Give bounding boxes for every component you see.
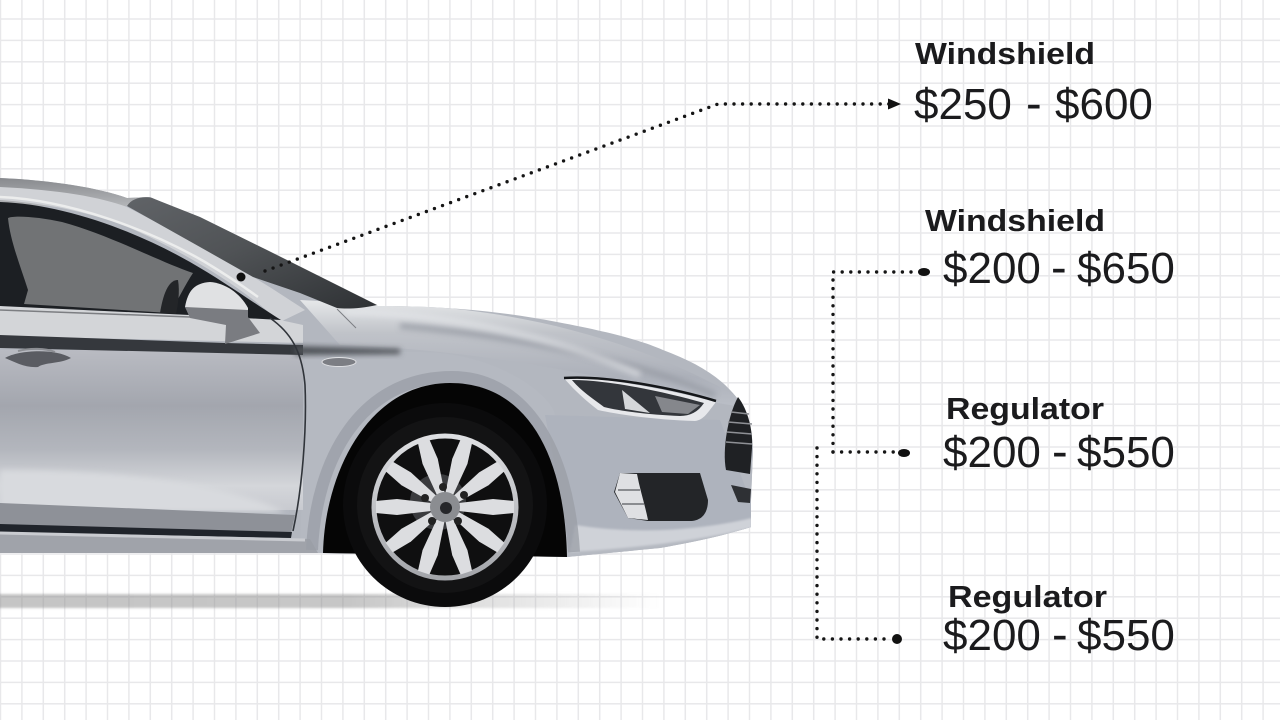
wheel arch opening xyxy=(323,383,567,557)
side marker badge xyxy=(322,358,356,366)
spokes xyxy=(376,439,514,575)
price: 200 to 550: $200 xyxy=(943,428,1041,477)
price: 200 to 550 second: - xyxy=(1052,607,1068,660)
leader: windshield to first price xyxy=(236,98,901,282)
A-pillar highlight xyxy=(0,197,258,297)
hub and lug nuts xyxy=(421,483,468,525)
label: regulator 1: Regulator xyxy=(946,391,1104,426)
price: 200 to 650: $200 xyxy=(943,244,1041,293)
roof xyxy=(0,178,156,206)
price: 200 to 650: - xyxy=(1051,240,1067,293)
price: 200 to 550: $550 xyxy=(1077,428,1175,477)
label: regulator 2: Regulator xyxy=(948,579,1107,614)
price: 200 to 550: - xyxy=(1052,424,1068,477)
side mirror xyxy=(185,282,260,344)
door handle xyxy=(5,349,71,367)
belt moulding xyxy=(0,306,303,343)
price: 250 to 600: $600 xyxy=(1055,80,1153,129)
rim xyxy=(374,436,516,578)
car body xyxy=(0,170,760,570)
leader: second price to third price xyxy=(833,268,930,457)
fog lamp housing xyxy=(614,473,708,521)
dark belt line xyxy=(0,335,303,355)
leader: fourth price xyxy=(817,448,902,644)
brake disc xyxy=(410,474,466,530)
car illustration xyxy=(0,170,760,607)
door panel xyxy=(0,381,303,510)
seat silhouette xyxy=(160,280,179,314)
front fender and bumper xyxy=(329,435,753,557)
wheel xyxy=(343,403,547,607)
side window frame xyxy=(0,202,281,320)
price: 250 to 600: - xyxy=(1026,76,1042,129)
label: windshield 2: Windshield xyxy=(925,203,1105,238)
side window glass xyxy=(8,217,193,313)
label: windshield 1: Windshield xyxy=(915,36,1095,71)
roof rail highlight xyxy=(0,187,305,322)
windshield xyxy=(127,197,377,309)
wheel arch lip xyxy=(312,377,574,552)
grille xyxy=(725,397,752,503)
lower door band xyxy=(0,503,295,533)
price: 200 to 650: $650 xyxy=(1077,244,1175,293)
hood xyxy=(300,300,738,398)
tyre xyxy=(343,403,547,607)
door shut line xyxy=(270,318,305,531)
ground shadow xyxy=(0,594,660,608)
price: 250 to 600: $250 xyxy=(914,80,1012,129)
price: 200 to 550 second: $550 xyxy=(1077,611,1175,660)
price: 200 to 550 second: $200 xyxy=(943,611,1041,660)
headlight xyxy=(564,378,716,421)
